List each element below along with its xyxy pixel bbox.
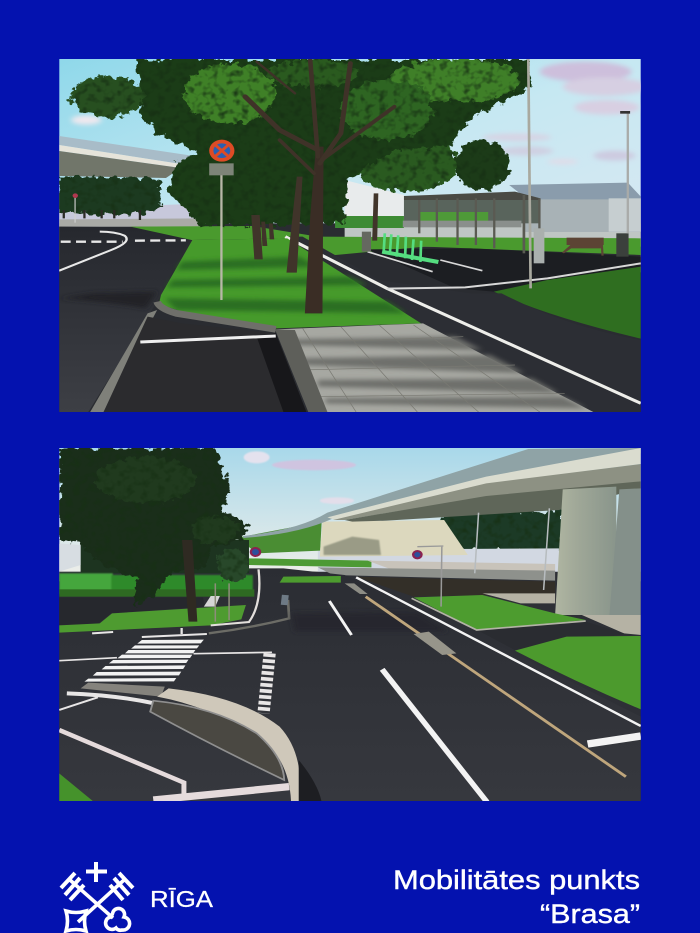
bridge [59, 136, 201, 178]
lower-left bay markings [59, 730, 289, 800]
road shadow band [291, 612, 448, 632]
right lawn [494, 267, 641, 339]
parking area [368, 248, 641, 292]
green e-scooters [382, 233, 438, 262]
small tree [218, 548, 248, 582]
sky [59, 448, 641, 581]
traffic island [81, 683, 300, 802]
pale ground behind bridge [318, 548, 559, 572]
street lamp [620, 111, 630, 233]
bridge deck [243, 448, 641, 538]
photo: road under the bridge with crossing [59, 448, 641, 802]
parking lot corner [59, 597, 205, 625]
road shadow [70, 292, 155, 308]
central lawn [414, 595, 586, 630]
icon: key shafts [70, 880, 124, 922]
island shadow [299, 760, 322, 802]
right lawn [515, 636, 641, 709]
bike shelter [403, 192, 541, 253]
parking bay lines [368, 252, 641, 289]
white building [344, 181, 404, 216]
brick parking bay [104, 317, 306, 412]
distant sign [73, 193, 78, 223]
tall lamp pole [528, 59, 531, 288]
parking mark [204, 596, 220, 607]
road markings [59, 232, 186, 271]
logo: Riga crossed keys [61, 862, 133, 931]
gravel beds [482, 593, 641, 635]
main canopy mass [71, 58, 530, 227]
title line two: “Brasa” [540, 899, 640, 929]
main tree trunk and branches [245, 60, 394, 313]
bench [562, 238, 604, 256]
central lawn curb [412, 598, 586, 630]
asphalt base [59, 572, 641, 802]
logo wordmark: RĪGA [150, 886, 213, 912]
background trees [342, 139, 512, 208]
far signs [250, 546, 443, 607]
bottom-left grass [59, 773, 94, 802]
lawn with tree shadows [159, 238, 421, 328]
background tree row trunks [64, 210, 140, 220]
left lawn [59, 605, 246, 633]
icon: square key bow [66, 911, 86, 931]
icon: right key bits [110, 873, 133, 900]
background tree row [59, 177, 161, 215]
distant hedge [335, 216, 404, 228]
clouds [244, 451, 356, 504]
small verge [280, 576, 341, 583]
grey hall [509, 183, 641, 232]
curb [157, 302, 276, 329]
icon: left key bits [61, 873, 84, 900]
lane dashes [329, 577, 641, 802]
road [59, 226, 145, 412]
large tree [59, 448, 249, 622]
trees behind bridge [440, 512, 563, 550]
cycle path [285, 237, 641, 412]
cross path [479, 622, 626, 650]
title [393, 865, 640, 929]
kerb [209, 600, 289, 633]
far lawn [130, 226, 641, 257]
photo: mobility point with tree, path and parking [59, 58, 647, 412]
zebra crossing [84, 640, 204, 682]
bridge pillars [555, 487, 641, 615]
dark greenery behind hedge [81, 540, 249, 573]
sapling stakes [215, 583, 229, 622]
clouds [71, 62, 647, 164]
charging pillar and bin [362, 228, 629, 263]
tan cycle lane strip [345, 583, 626, 777]
paved sidewalk [275, 323, 593, 412]
icon: trefoil key bow [106, 908, 130, 930]
distant ground [59, 203, 203, 227]
stop line and markings [59, 628, 272, 713]
icon: cross [86, 862, 107, 882]
title line one: Mobilitātes punkts [393, 865, 640, 895]
dark bank [356, 577, 555, 597]
no stopping sign [209, 140, 234, 300]
bridge abutment [320, 520, 468, 557]
lamp posts [475, 508, 549, 590]
background trunks [251, 177, 378, 273]
left white line [211, 569, 259, 625]
grey gutter strip [90, 310, 157, 412]
grassy embankment [237, 522, 322, 553]
hedge [59, 573, 253, 594]
base asphalt [59, 568, 641, 802]
far verge and fence [249, 558, 555, 581]
cycle path white line [285, 237, 641, 403]
sky [59, 59, 641, 272]
white building behind tree [59, 543, 81, 572]
asphalt base [59, 223, 641, 412]
